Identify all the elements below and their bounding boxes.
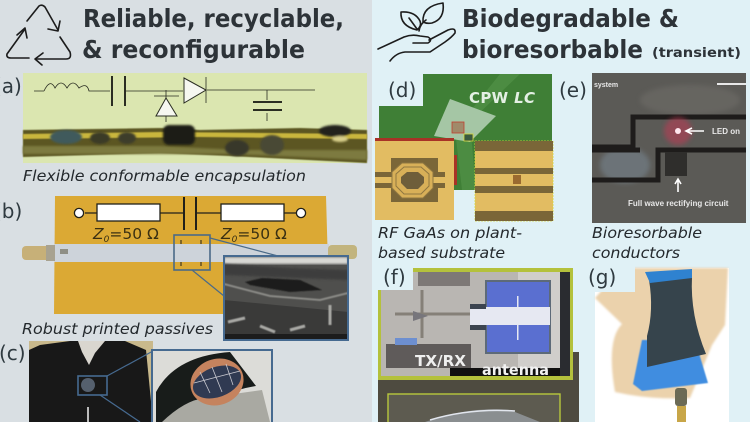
text: LED on: LED on: [712, 127, 740, 136]
caption: RF GaAs on plant-based substrate: RF GaAs on plant-: [378, 224, 522, 242]
panel: biodegradable and bioresorbable: [375, 3, 746, 422]
callout box: [174, 235, 210, 270]
text: full wave rectifying circuit: Full wave rectifying circuit: [628, 199, 729, 208]
text: impedance left: 0: [104, 235, 110, 245]
caption: robust printed passives: Robust printed passives: [22, 320, 213, 338]
caption: bioresorbable conductors: Bioresorbable: [592, 224, 702, 242]
inset: solar tag: [152, 350, 272, 422]
label: d: [375, 74, 422, 104]
label: f: (f): [383, 265, 406, 289]
photo: antenna and TX/RX chip: [375, 262, 573, 380]
caption: RF GaAs on plant-based substrate: based substrate: [378, 244, 505, 262]
photo: flexible device in hand: [585, 262, 729, 422]
photo: lower dark device photo: [378, 352, 579, 422]
inset: SEM micrograph: [224, 256, 348, 340]
circuit schematic: [74, 197, 306, 266]
photo: bioresorbable conductors: [592, 73, 746, 223]
photo: leaf with GaAs: [375, 74, 552, 190]
label: d: (d): [388, 78, 416, 102]
icon: recycling triangle: [7, 5, 71, 65]
label: e: (e): [559, 78, 587, 102]
text: impedance right: 0: [232, 235, 238, 245]
heading: reconfigurable: & reconfigurable: [82, 35, 305, 64]
heading: biodegradable: Biodegradable &: [462, 4, 679, 33]
text: impedance right: Z: [220, 225, 232, 243]
caption: RF GaAs on plant-based substrate: [378, 224, 522, 262]
caption: bioresorbable conductors: [592, 224, 702, 262]
heading: bioresorbable: bioresorbable: [462, 35, 643, 64]
text: antenna: antenna: [482, 361, 549, 379]
photo: person wearing device: [29, 341, 153, 422]
circuit schematic: [34, 76, 315, 122]
heading: reliable: Reliable, recyclable,: [83, 4, 344, 33]
arrow: LED: [686, 128, 704, 134]
text: TX/RX: TX/RX: [415, 352, 466, 370]
inset: GaAs capacitor: [475, 141, 553, 221]
text: impedance right: =50 Ω: [237, 225, 287, 243]
arrow: rectifier: [675, 179, 681, 192]
text: impedance left: =50 Ω: [109, 225, 159, 243]
label: g: (g): [588, 265, 616, 289]
text: CPW LC: CPW LC: [469, 89, 535, 107]
photo: flexible encapsulation with circuit: [23, 73, 367, 163]
connector: left: [22, 245, 55, 261]
panel: reliable, recyclable and reconfigurable: [0, 4, 367, 422]
inset: GaAs inductor: [375, 138, 457, 220]
panel: right background: [372, 0, 750, 422]
caption: bioresorbable conductors: conductors: [592, 244, 680, 262]
caption: flexible conformable encapsulation: Flexible conformable encapsulation: [23, 167, 306, 185]
text: impedance left: Z: [92, 225, 104, 243]
heading: transient: (transient): [652, 46, 741, 61]
label: g: [585, 262, 635, 292]
panel: left background: [0, 0, 372, 422]
label: f: [375, 262, 413, 290]
connector: right: [328, 245, 357, 259]
photo: printed filter board: [22, 196, 357, 340]
text: system: system: [594, 82, 618, 89]
icon: hand holding plant: [378, 3, 455, 61]
